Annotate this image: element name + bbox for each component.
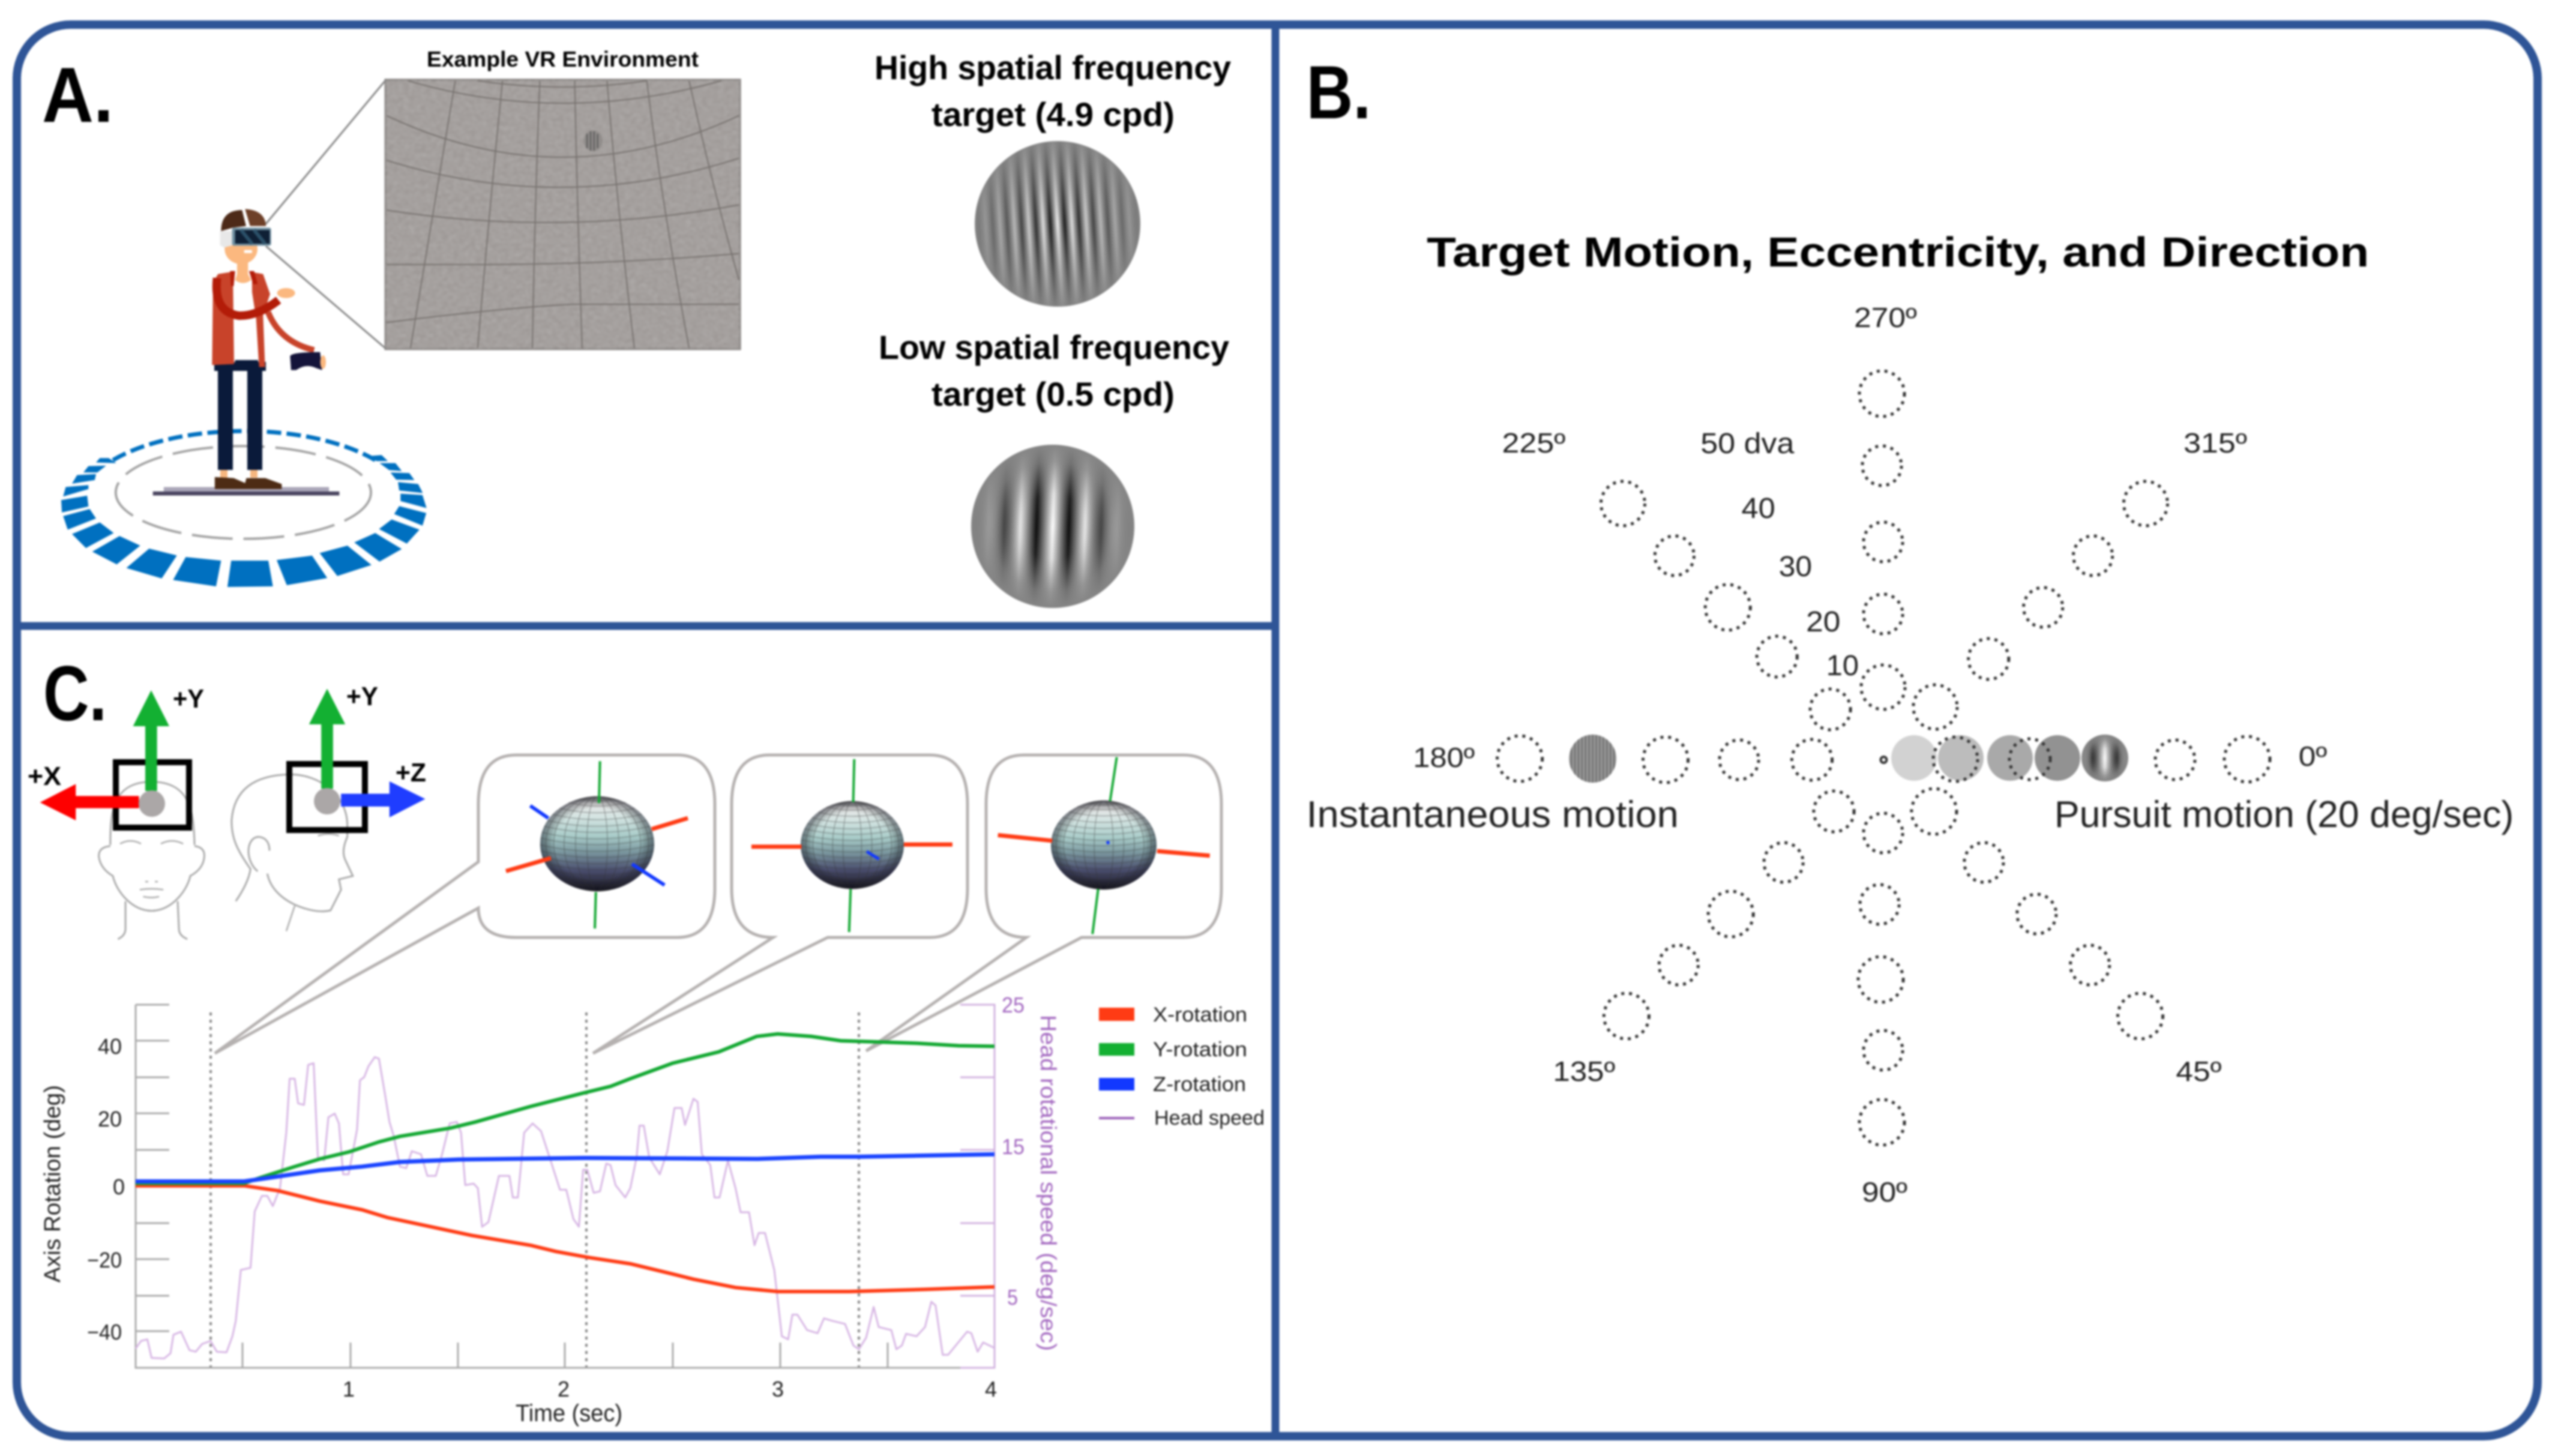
VR environment view bbox=[385, 80, 740, 349]
low spatial frequency label: Low spatial frequency bbox=[879, 328, 1229, 366]
torso and arms bbox=[212, 262, 326, 370]
chart legend: X-rotation bbox=[1153, 1003, 1247, 1026]
axis letters: +Y bbox=[173, 684, 204, 714]
time axis numbers bbox=[343, 1377, 997, 1401]
high spatial frequency gabor bbox=[975, 141, 1140, 307]
dashed target positions bbox=[1497, 371, 2168, 1145]
left axis numbers bbox=[87, 1034, 125, 1344]
dashed pursuit positions bbox=[1933, 736, 2270, 782]
rotation ellipsoid 2 bbox=[751, 759, 952, 932]
green Y-rotation line bbox=[136, 1034, 995, 1184]
instantaneous motion label: Instantaneous motion bbox=[1307, 794, 1679, 835]
direction labels: 225º bbox=[1502, 428, 1566, 459]
instantaneous target grating bbox=[1569, 735, 1616, 783]
panel C label: C. bbox=[43, 649, 107, 737]
eccentricity labels bbox=[1700, 428, 1859, 682]
chart legend: Z-rotation bbox=[1153, 1073, 1246, 1096]
callout bubble 2 bbox=[593, 755, 968, 1053]
eccentricity labels: 10 bbox=[1826, 650, 1859, 682]
head reference boxes bbox=[116, 762, 365, 830]
axis letters: +Z bbox=[396, 758, 426, 787]
left axis numbers: −40 bbox=[87, 1320, 122, 1344]
left axis and ticks bbox=[136, 1005, 960, 1368]
axis letters: +X bbox=[28, 762, 61, 791]
low spatial frequency gabor bbox=[971, 445, 1134, 608]
rotation ellipsoid 1 bbox=[506, 761, 688, 928]
axis letters bbox=[28, 682, 426, 791]
eccentricity labels: 20 bbox=[1806, 606, 1840, 638]
eccentricity labels: 30 bbox=[1779, 551, 1812, 583]
eccentricity labels: 40 bbox=[1741, 493, 1775, 525]
example VR environment heading: Example VR Environment bbox=[427, 47, 699, 71]
legs and shoes bbox=[214, 362, 281, 489]
head speed line bbox=[136, 1057, 995, 1359]
callout bubble 1 bbox=[215, 755, 715, 1053]
low spatial frequency label: target (0.5 cpd) bbox=[931, 375, 1175, 413]
time axis numbers: 4 bbox=[985, 1377, 997, 1401]
left axis title: Axis Rotation (deg) bbox=[40, 1085, 65, 1283]
time axis title: Time (sec) bbox=[516, 1400, 622, 1427]
arrow: +Y green side bbox=[309, 689, 345, 789]
small target in scene bbox=[583, 130, 603, 151]
right axis numbers: 5 bbox=[1007, 1285, 1018, 1310]
time axis numbers: 2 bbox=[558, 1377, 570, 1401]
direction labels: 270º bbox=[1854, 302, 1917, 333]
right axis numbers bbox=[1002, 993, 1025, 1310]
blue Z-rotation line bbox=[136, 1154, 995, 1181]
left axis numbers: −20 bbox=[87, 1248, 122, 1272]
floor ring bbox=[61, 431, 427, 587]
pursuit motion filled targets bbox=[1891, 735, 2128, 781]
red X-rotation line bbox=[136, 1186, 995, 1292]
direction labels: 45º bbox=[2176, 1056, 2222, 1087]
direction labels: 0º bbox=[2299, 741, 2327, 772]
direction labels: 135º bbox=[1553, 1056, 1615, 1087]
time axis numbers: 3 bbox=[772, 1377, 784, 1401]
chart legend: Y-rotation bbox=[1153, 1038, 1247, 1061]
left axis numbers: 0 bbox=[113, 1175, 125, 1199]
time axis numbers: 1 bbox=[343, 1377, 355, 1401]
direction labels: 180º bbox=[1413, 742, 1475, 773]
right axis title: Head rotational speed (deg/sec) bbox=[1036, 1015, 1061, 1351]
front head outline bbox=[99, 782, 204, 939]
direction labels: 315º bbox=[2183, 428, 2247, 459]
fixation point bbox=[1881, 757, 1886, 763]
high spatial frequency label: target (4.9 cpd) bbox=[931, 95, 1175, 133]
side head outline bbox=[232, 774, 353, 931]
left axis numbers: 20 bbox=[98, 1107, 122, 1131]
right axis numbers: 15 bbox=[1002, 1134, 1025, 1159]
arrow: +Z blue bbox=[341, 781, 426, 817]
sample time markers bbox=[211, 1012, 859, 1367]
axis letters: +Y bbox=[346, 682, 378, 711]
rotation ellipsoid 3 bbox=[998, 757, 1210, 934]
headset view lines bbox=[266, 80, 386, 349]
callout bubble 3 bbox=[866, 755, 1221, 1051]
panel B: target motion, eccentricity and direction bbox=[1307, 51, 2514, 1208]
low spatial frequency label bbox=[879, 328, 1229, 413]
left axis numbers: 40 bbox=[98, 1034, 122, 1059]
panel B title: Target Motion, Eccentricity, and Direction bbox=[1427, 229, 2369, 275]
panel C: head rotation bbox=[28, 649, 1265, 1427]
arrow: +Y green front bbox=[133, 690, 169, 791]
high spatial frequency label: High spatial frequency bbox=[874, 49, 1231, 86]
person wearing VR headset bbox=[212, 209, 326, 489]
panel A label: A. bbox=[42, 51, 113, 139]
direction labels: 90º bbox=[1862, 1177, 1907, 1208]
head and headset bbox=[220, 209, 271, 264]
chart legend bbox=[1099, 1003, 1265, 1130]
head pivot points bbox=[139, 788, 340, 817]
eccentricity labels: 50 dva bbox=[1700, 428, 1795, 460]
panel A: VR setup and targets bbox=[42, 47, 1231, 608]
pursuit motion label: Pursuit motion (20 deg/sec) bbox=[2054, 794, 2514, 835]
right axis and ticks bbox=[960, 1005, 995, 1368]
chart legend: Head speed bbox=[1154, 1107, 1265, 1130]
arrow: +X red bbox=[40, 784, 139, 820]
direction labels bbox=[1413, 302, 2327, 1208]
right axis numbers: 25 bbox=[1002, 993, 1025, 1017]
high spatial frequency label bbox=[874, 49, 1231, 133]
head axis arrows bbox=[40, 689, 426, 820]
panel B label: B. bbox=[1307, 51, 1371, 134]
rotation time-series chart bbox=[40, 993, 1265, 1427]
